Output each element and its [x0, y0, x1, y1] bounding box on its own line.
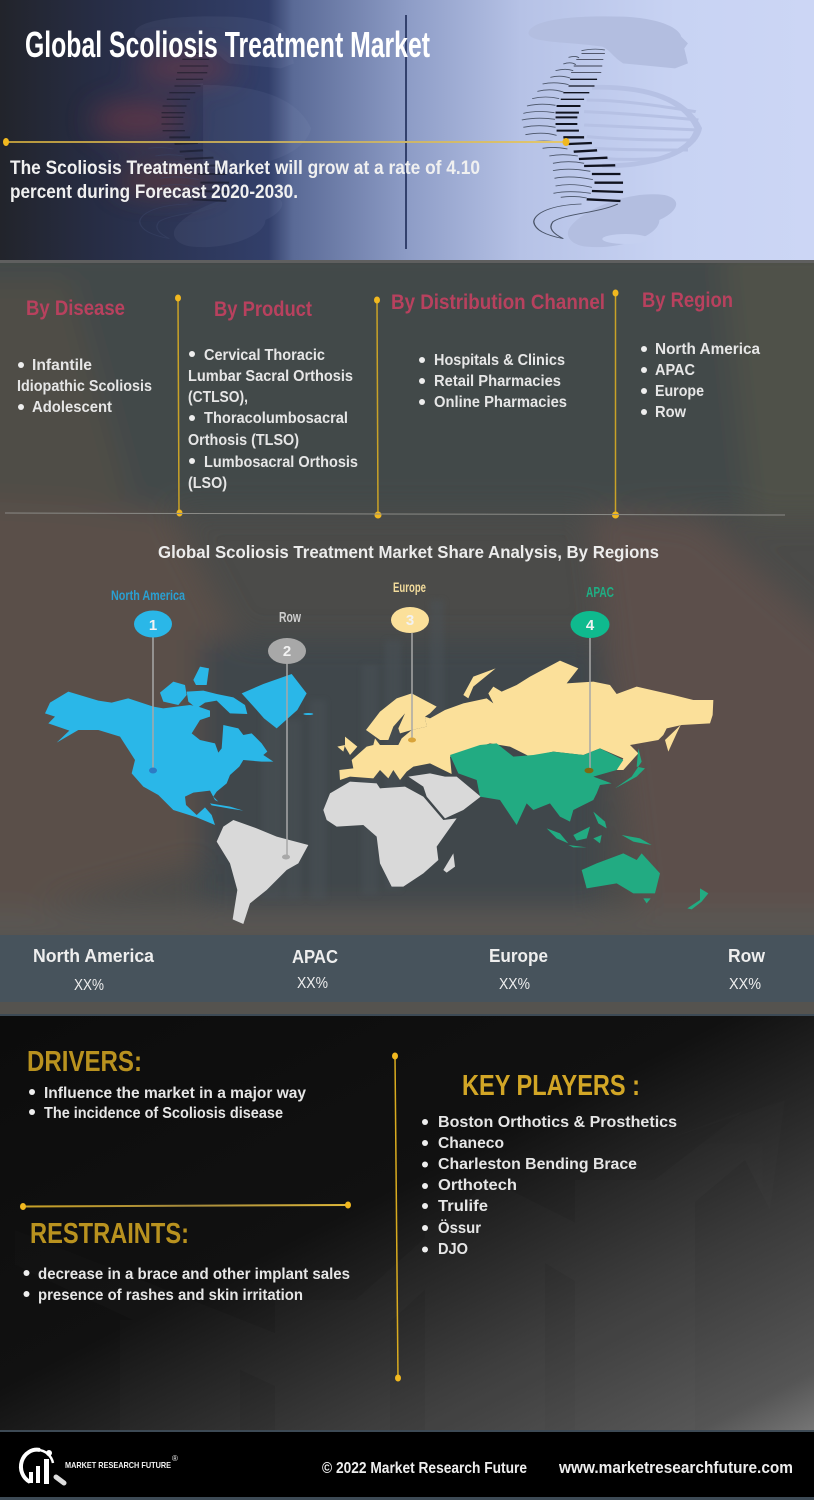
- list: drivers: The incidence of Scoliosis disease: [44, 1105, 283, 1122]
- divider: column 1: [175, 294, 182, 516]
- pin: north america: North America: [111, 587, 185, 603]
- divider: vertical gold line: [392, 1052, 401, 1382]
- illustration: ghost spine: [140, 53, 229, 239]
- icon: ribcage silhouette: [584, 87, 698, 166]
- list: distribution: [419, 352, 567, 411]
- icon: head silhouette: [546, 16, 688, 68]
- list: key players: Trulife: [438, 1198, 488, 1215]
- list: region: North America: [655, 341, 760, 358]
- stat: north america: North America: [33, 945, 155, 966]
- pin: europe: Europe: [393, 579, 426, 595]
- illustration: ghost heat spots: [92, 55, 235, 194]
- list: restraints: decrease in a brace and other implant sales: [38, 1266, 350, 1283]
- map: africa and middle east: [323, 773, 481, 887]
- divider: column 2: [374, 296, 382, 518]
- list: restraints: [24, 1266, 350, 1304]
- heading: by distribution channel: By Distribution Channel: [391, 291, 605, 314]
- divider: column 3: [612, 290, 619, 518]
- chart: world map by region: [45, 579, 713, 924]
- list: region: Row: [655, 404, 687, 421]
- panel: header: [0, 0, 814, 260]
- illustration: ghost body silhouette: [134, 16, 260, 247]
- background: chart bars: [262, 600, 444, 900]
- icon: pelvis silhouette: [568, 194, 676, 247]
- list: key players: Chaneco: [438, 1135, 504, 1152]
- stat: europe: XX%: [499, 976, 530, 993]
- text block: growth statement: percent during Forecast 2020-2030.: [10, 182, 298, 203]
- heading: drivers: DRIVERS:: [27, 1046, 142, 1078]
- stat: apac: [292, 946, 338, 992]
- list: drivers: [29, 1085, 306, 1122]
- background: faint arrow chart: [15, 1100, 785, 1430]
- list: disease: Infantile: [32, 357, 92, 374]
- stat: row: XX%: [729, 976, 761, 993]
- background: blurred hands and chart: [0, 240, 814, 948]
- list: key players: Charleston Bending Brace: [438, 1156, 637, 1173]
- heading: map section: Global Scoliosis Treatment Market Share Analysis, By Regions: [158, 542, 659, 562]
- heading: by disease: By Disease: [26, 297, 125, 320]
- panel: drivers restraints key players: [0, 1014, 814, 1430]
- list: restraints: presence of rashes and skin irritation: [38, 1287, 303, 1304]
- list: drivers: Influence the market in a major way: [44, 1085, 306, 1102]
- stat: row: Row: [728, 945, 766, 966]
- text block: growth statement: [10, 158, 480, 203]
- divider: drivers and restraints: [20, 1202, 351, 1210]
- stat: europe: Europe: [489, 945, 548, 966]
- stat: apac: APAC: [292, 946, 338, 967]
- pin: north america: 1: [149, 617, 157, 634]
- list: product: Thoracolumbosacral: [204, 410, 348, 427]
- list: key players: Boston Orthotics & Prosthetics: [438, 1114, 677, 1131]
- logo text: [65, 1454, 178, 1470]
- logo text: MARKET RESEARCH FUTURE: [65, 1460, 171, 1470]
- panel: regional share bar: [0, 935, 814, 1014]
- list: product: Orthosis (TLSO): [188, 432, 299, 449]
- stat: apac: XX%: [297, 975, 328, 992]
- pin: north america: [111, 587, 185, 774]
- website: www.marketresearchfuture.com: [558, 1459, 793, 1477]
- map: eurasia: [337, 661, 713, 780]
- pin: row: [268, 609, 306, 860]
- list: disease: Idiopathic Scoliosis: [17, 378, 152, 395]
- pin: apac: [570, 584, 614, 773]
- list: product: Lumbar Sacral Orthosis: [188, 368, 353, 385]
- icon: market research future logo: [21, 1450, 64, 1484]
- list: product: Cervical Thoracic: [204, 347, 325, 364]
- map: north america: [45, 667, 313, 825]
- panel: footer: [0, 1430, 814, 1500]
- connector: header gold line: [3, 138, 570, 146]
- list: region: [641, 341, 760, 421]
- title: Global Scoliosis Treatment Market: [25, 24, 430, 65]
- list: disease: Adolescent: [32, 399, 113, 416]
- pin: europe: 3: [406, 612, 414, 629]
- heading: restraints: RESTRAINTS:: [30, 1218, 189, 1250]
- heading: by product: By Product: [214, 298, 312, 321]
- list: distribution: Online Pharmacies: [434, 394, 567, 411]
- stat: row: [728, 945, 766, 993]
- pin: row: 2: [283, 643, 291, 660]
- panel: segmentation columns: [17, 289, 760, 518]
- list: key players: Orthotech: [438, 1177, 517, 1194]
- stat: north america: [33, 945, 155, 994]
- text block: growth statement: The Scoliosis Treatment Market will grow at a rate of 4.10: [10, 158, 480, 179]
- pin: apac: APAC: [586, 584, 614, 601]
- list: product: [188, 347, 358, 492]
- list: region: Europe: [655, 383, 704, 400]
- heading: key players: KEY PLAYERS :: [462, 1070, 640, 1102]
- list: key players: [422, 1114, 677, 1258]
- list: distribution: Hospitals & Clinics: [434, 352, 565, 369]
- copyright: © 2022 Market Research Future: [322, 1460, 527, 1477]
- list: product: Lumbosacral Orthosis: [204, 454, 358, 471]
- list: disease: [17, 357, 152, 416]
- pin: europe: [391, 579, 429, 742]
- map: south america: [217, 820, 308, 924]
- logo text: ®: [172, 1454, 178, 1463]
- divider: header vertical line: [405, 15, 407, 249]
- stat: europe: [489, 945, 548, 993]
- stat: north america: XX%: [74, 977, 104, 994]
- pin: apac: 4: [586, 617, 595, 634]
- list: region: APAC: [655, 362, 695, 379]
- list: distribution: Retail Pharmacies: [434, 373, 561, 390]
- heading: by region: By Region: [642, 289, 733, 312]
- pin: row: Row: [279, 609, 301, 626]
- list: product: (LSO): [188, 475, 227, 492]
- list: key players: DJO: [438, 1241, 468, 1258]
- list: key players: Össur: [438, 1218, 481, 1237]
- map: asia pacific: [450, 743, 708, 909]
- illustration: spine: [522, 49, 623, 239]
- list: product: (CTLSO),: [188, 389, 248, 406]
- panel: segmentation and map background: [0, 260, 814, 935]
